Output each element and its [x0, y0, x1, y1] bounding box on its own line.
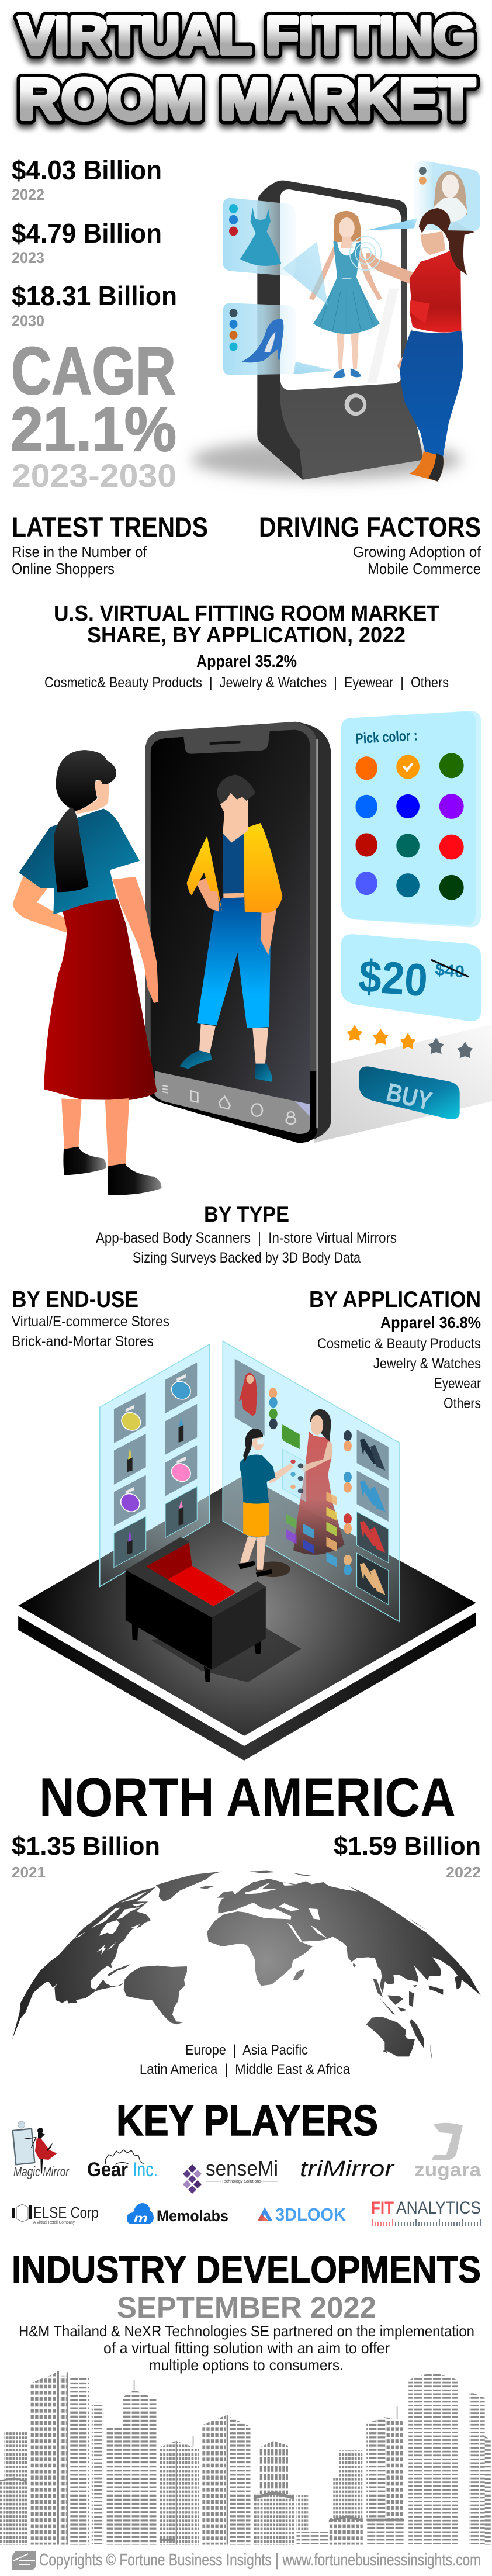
north america 2021 value	[12, 1832, 160, 1881]
by type: App-based Body Scanners | In-store Virtual Mirrors	[96, 1230, 397, 1246]
cityscape	[0, 2371, 492, 2545]
borneo and sumatra	[373, 1977, 424, 2048]
by end-use: Virtual/E-commerce Stores	[12, 1313, 169, 1330]
logo: fit analytics	[371, 2198, 481, 2226]
north america heading: NORTH AMERICA	[39, 1766, 456, 1828]
panel: price tag	[341, 934, 481, 1021]
scan rings	[350, 237, 381, 270]
CAGR block: 2023-2030	[12, 457, 176, 494]
star rating	[347, 1025, 473, 1058]
U.S. share heading: Apparel 35.2%	[196, 652, 297, 671]
shopper with headset	[238, 1429, 294, 1577]
illustration: phone shopping app	[12, 711, 492, 1195]
app tiles	[282, 1449, 337, 1567]
logo: else corp: A Virtual Retail Company	[33, 2221, 75, 2225]
logo: memolabs	[127, 2203, 228, 2225]
illustration: isometric virtual store	[18, 1341, 476, 1761]
mirror screen	[280, 189, 401, 390]
market size stats	[12, 155, 177, 330]
virtual woman	[293, 1409, 345, 1555]
stat 2030: 2030	[12, 312, 44, 330]
north america 2021 value: $1.35 Billion	[12, 1832, 160, 1861]
logo: gear inc	[87, 2150, 158, 2181]
panel: dress options	[223, 198, 328, 305]
logo: zugara	[414, 2123, 481, 2180]
buy button	[359, 1066, 460, 1119]
U.S. share heading: SHARE, BY APPLICATION, 2022	[87, 623, 406, 648]
other regions: Europe | Asia Pacific	[185, 2042, 308, 2058]
ground shadow	[314, 1024, 492, 1143]
shopping cart tile	[282, 1424, 300, 1449]
driving factors: Mobile Commerce	[368, 560, 481, 578]
logo: trimirror: triMirror	[300, 2157, 395, 2181]
buy label: BUY	[384, 1078, 435, 1116]
title: ROOM MARKET	[18, 67, 475, 131]
pick color label: Pick color :	[355, 727, 418, 747]
development description: multiple options to consumers.	[149, 2356, 344, 2374]
title: VIRTUAL FITTING	[18, 7, 475, 65]
north america 2021 value: 2021	[12, 1863, 46, 1881]
logo: sensemi	[183, 2156, 278, 2194]
logo: magic mirror	[13, 2121, 70, 2179]
logo: magic mirror: Magic Mirror	[13, 2164, 70, 2179]
by end-use: Brick-and-Mortar Stores	[12, 1333, 154, 1350]
mirror reflection woman	[309, 211, 382, 378]
title: ROOM MARKET	[18, 67, 475, 131]
key players heading: KEY PLAYERS	[116, 2097, 378, 2145]
kiosk button	[345, 393, 366, 416]
panel: shoe options	[223, 303, 334, 375]
globe west: americas	[12, 1872, 235, 2040]
by application: Others	[444, 1395, 481, 1412]
logo: sensemi: Technology Solutions	[221, 2180, 262, 2184]
sofa shadow	[151, 1628, 302, 1682]
north america 2022 value: 2022	[446, 1863, 481, 1881]
title	[18, 7, 475, 131]
title: VIRTUAL FITTING	[18, 7, 475, 65]
CAGR block: CAGR	[11, 334, 176, 409]
latest trends: Online Shoppers	[12, 560, 115, 578]
by type: BY TYPE	[204, 1202, 289, 1226]
by type: Sizing Surveys Backed by 3D Body Data	[133, 1250, 361, 1266]
by end-use: BY END-USE	[12, 1287, 138, 1312]
CAGR block	[11, 334, 176, 494]
panel: left wall cosmetics	[100, 1344, 210, 1586]
other regions	[140, 2042, 351, 2077]
australia	[366, 2017, 415, 2056]
stat 2023: 2023	[12, 249, 44, 267]
latest trends: Rise in the Number of	[12, 543, 147, 561]
arctic islands	[250, 1871, 427, 1930]
globe east: europe, africa, asia, oceania	[207, 1871, 481, 2059]
illustration: virtual mirror kiosk with woman	[192, 160, 480, 482]
eurasia	[218, 1879, 481, 1996]
driving factors	[259, 511, 481, 578]
logo: 3dlook: 3DLOOK	[275, 2204, 347, 2225]
africa	[207, 1911, 313, 1986]
logo: fit analytics: FIT	[371, 2198, 394, 2218]
cut-outs: inland seas	[244, 1881, 327, 1942]
stat 2022: 2022	[12, 186, 44, 203]
logo: memolabs: m	[134, 2212, 148, 2225]
by application	[309, 1287, 481, 1412]
development date: SEPTEMBER 2022	[117, 2291, 376, 2324]
app navigation bar	[154, 1071, 310, 1134]
by application: Apparel 36.8%	[380, 1313, 481, 1332]
price label: $40	[434, 960, 465, 981]
by application: Eyewear	[434, 1375, 481, 1392]
real woman	[366, 208, 474, 482]
panel: hair options	[366, 160, 480, 235]
logo: zugara: zugara	[414, 2159, 481, 2180]
logo: gear inc: Gear	[87, 2159, 128, 2181]
platform	[18, 1475, 476, 1761]
logo: gear inc: Inc.	[133, 2159, 158, 2181]
panel: pick color	[341, 711, 481, 928]
other regions: Latin America | Middle East & Africa	[140, 2062, 351, 2077]
panel: right wall fashion	[223, 1341, 399, 1621]
stat 2023	[12, 218, 162, 267]
world map globe	[12, 1871, 481, 2059]
price label: $20	[357, 950, 429, 1006]
development description: of a virtual fitting solution with an aim to offer	[103, 2339, 390, 2357]
model on screen	[179, 774, 282, 1082]
north america 2022 value: $1.59 Billion	[334, 1832, 481, 1861]
by end-use	[12, 1287, 169, 1350]
by type	[96, 1202, 397, 1266]
logo: else corp	[12, 2204, 99, 2225]
stat 2022: $4.03 Billion	[12, 155, 162, 185]
phone	[145, 722, 331, 1143]
CAGR block: 21.1%	[11, 394, 176, 464]
stat 2030: $18.31 Billion	[12, 281, 177, 311]
footer logo	[12, 2551, 36, 2570]
madagascar	[293, 1969, 305, 1980]
logo: else corp: ELSE Corp	[33, 2204, 99, 2221]
sri lanka and small islands	[353, 1963, 417, 1987]
armchair	[126, 1537, 266, 1682]
north america 2022 value	[334, 1832, 481, 1881]
stat 2030	[12, 281, 177, 330]
development description	[19, 2322, 474, 2374]
U.S. share heading: U.S. VIRTUAL FITTING ROOM MARKET	[54, 601, 439, 626]
U.S. share heading	[44, 601, 449, 691]
stat 2023: $4.79 Billion	[12, 218, 162, 248]
logo: memolabs: Memolabs	[157, 2207, 228, 2225]
logo: fit analytics: ANALYTICS	[396, 2198, 481, 2218]
japan and east islands	[428, 1986, 443, 1995]
kiosk body	[257, 181, 424, 480]
logo: sensemi: senseMi	[206, 2156, 278, 2180]
latest trends	[12, 511, 208, 578]
real woman back view	[12, 750, 162, 1195]
driving factors: Growing Adoption of	[353, 543, 481, 561]
stat 2022	[12, 155, 162, 203]
latest trends: LATEST TRENDS	[12, 511, 208, 542]
